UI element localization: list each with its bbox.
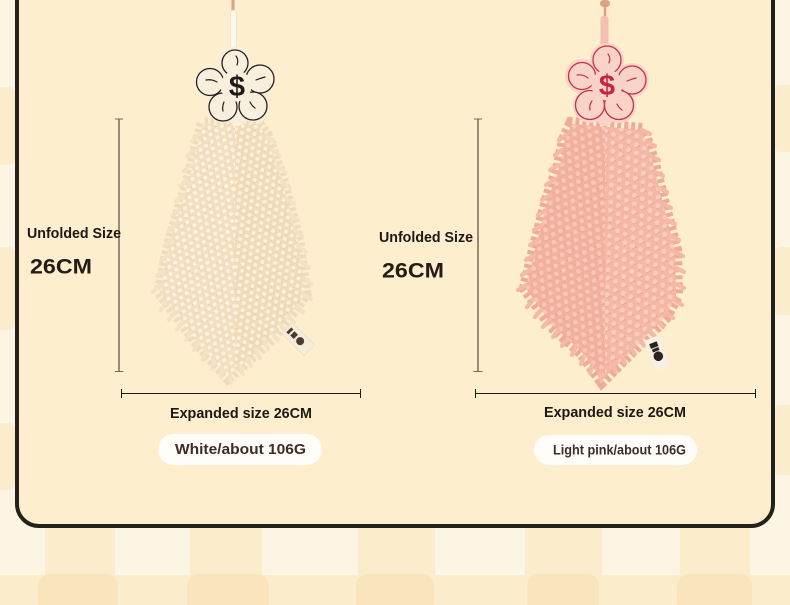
left horizontal dimension line (121, 389, 361, 398)
left unfolded size label: Unfolded Size (27, 226, 121, 242)
left vertical dimension line (115, 119, 124, 372)
left 26CM value: 26CM (30, 256, 92, 278)
white towel chenille body (150, 110, 320, 390)
white colour weight pill (158, 434, 322, 465)
pink towel hanging loop (600, 0, 610, 48)
right unfolded size label: Unfolded Size (379, 230, 473, 246)
left expanded size label: Expanded size 26CM (170, 405, 312, 422)
white flower badge with dollar sign: $ (229, 71, 245, 103)
pink flower badge with dollar sign: $ (599, 70, 615, 102)
right expanded size label: Expanded size 26CM (544, 404, 686, 421)
white colour weight pill: White/about 106G (175, 441, 306, 458)
white towel label tag (281, 322, 315, 356)
pink towel product (515, 0, 690, 390)
light pink colour weight pill (534, 435, 697, 465)
right vertical dimension line (474, 119, 482, 372)
right 26CM value: 26CM (382, 260, 444, 282)
light pink colour weight pill: Light pink/about 106G (553, 442, 686, 458)
white towel hanging loop (230, 0, 236, 52)
pink towel label tag (644, 335, 670, 371)
white towel product (150, 0, 320, 390)
pink flower badge with dollar sign (565, 43, 649, 126)
pink towel chenille body (515, 115, 690, 390)
white flower badge with dollar sign (194, 47, 276, 126)
right horizontal dimension line (476, 389, 756, 398)
